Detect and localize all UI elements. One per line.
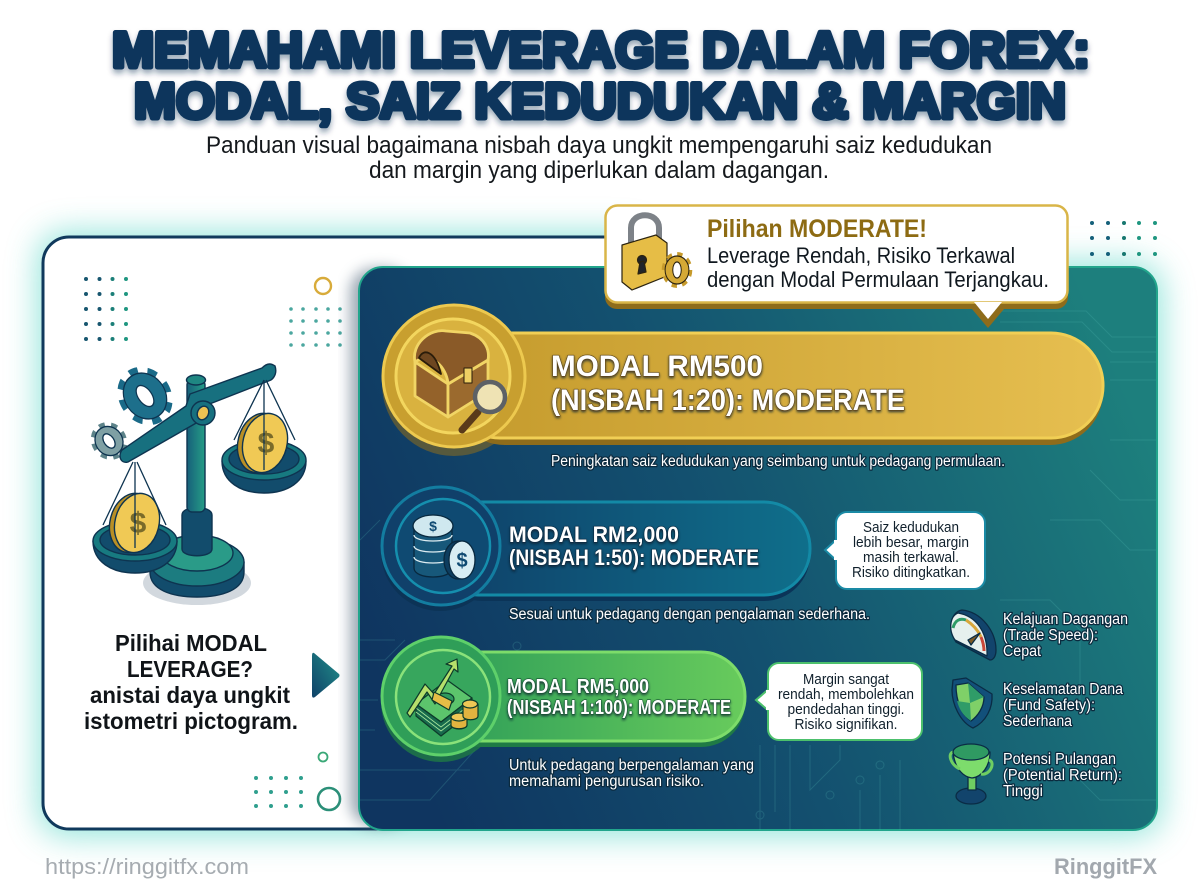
callout text: Leverage Rendah, Risiko Terkawal <box>707 243 1015 268</box>
panel: right leverage panel <box>359 206 1157 830</box>
callout: position size note <box>825 512 985 589</box>
potential return label: Tinggi <box>1003 783 1043 800</box>
callout: position size note: Saiz kedudukan <box>863 519 959 536</box>
banner: RM5,000 green <box>381 637 745 762</box>
left text block: Pilihai MODAL <box>115 630 267 656</box>
callout: margin note <box>756 663 922 740</box>
icon: coin stacks <box>413 515 475 579</box>
banner: RM2,000 blue <box>381 487 810 611</box>
icon: small gear <box>87 418 131 464</box>
potential return label: (Potential Return): <box>1003 767 1122 784</box>
callout: position size note: lebih besar, margin <box>853 534 969 551</box>
banner: RM500 gold <box>382 305 1103 456</box>
title: MODAL, SAIZ KEDUDUKAN & MARGIN <box>134 73 1066 129</box>
icon: coin stacks: $ <box>456 550 468 572</box>
subtitle <box>206 132 992 184</box>
fund safety label: (Fund Safety): <box>1003 697 1095 714</box>
icon: trophy <box>950 744 992 804</box>
potential return label: Potensi Pulangan <box>1003 751 1116 768</box>
scale post <box>187 380 205 512</box>
footer brand: RinggitFX <box>1054 854 1157 879</box>
icon: large gear <box>112 362 178 430</box>
background glow <box>38 232 1162 836</box>
callout <box>605 206 1068 328</box>
banner heading <box>509 522 759 570</box>
right pan bowl <box>222 461 306 493</box>
callout text: dengan Modal Permulaan Terjangkau. <box>707 267 1049 292</box>
callout text <box>707 243 1049 292</box>
potential return label <box>1003 751 1122 800</box>
fund safety label <box>1003 681 1123 730</box>
callout: margin note: pendedahan tinggi. <box>788 701 904 718</box>
banner heading: (NISBAH 1:100): MODERATE <box>507 697 731 719</box>
left text block: anistai daya ungkit <box>90 682 290 708</box>
icon: money stack with growth arrow <box>407 659 478 736</box>
fund safety label: Sederhana <box>1003 713 1072 730</box>
decorative dots: top right <box>1090 221 1157 256</box>
title <box>112 22 1090 129</box>
banner heading: (NISBAH 1:20): MODERATE <box>551 384 905 417</box>
decorative ring: small green <box>318 752 328 762</box>
decorative ring: large teal <box>318 788 340 810</box>
banner caption <box>509 757 754 790</box>
banner caption: memahami pengurusan risiko. <box>509 773 704 790</box>
trade speed label: (Trade Speed): <box>1003 627 1098 644</box>
callout: margin note: rendah, membolehkan <box>778 686 914 703</box>
icon: shield <box>952 678 992 728</box>
fund safety label: Keselamatan Dana <box>1003 681 1123 698</box>
icon: balance scale with gears <box>87 362 306 605</box>
circuit pattern <box>360 311 1156 830</box>
left text block: LEVERAGE? <box>127 656 253 682</box>
banner caption: Sesuai untuk pedagang dengan pengalaman sederhana. <box>509 606 870 623</box>
title: MEMAHAMI LEVERAGE DALAM FOREX: <box>112 22 1090 78</box>
panel: left card <box>43 237 663 829</box>
decorative dots: upper right <box>289 307 342 347</box>
banner caption: Peningkatan saiz kedudukan yang seimbang untuk pedagang permulaan. <box>551 453 1005 470</box>
decorative ring: gold <box>315 278 331 294</box>
left coin: $ <box>130 507 147 540</box>
left text block <box>84 630 298 734</box>
panel shadow <box>350 268 410 826</box>
banner heading: MODAL RM500 <box>551 350 763 383</box>
right coin <box>231 409 294 477</box>
subtitle: Panduan visual bagaimana nisbah daya ungkit mempengaruhi saiz kedudukan <box>206 132 992 159</box>
left text block: istometri pictogram. <box>84 708 298 734</box>
banner heading: (NISBAH 1:50): MODERATE <box>509 545 759 570</box>
callout: position size note: Risiko ditingkatkan. <box>852 564 970 581</box>
right pan strings <box>234 380 295 470</box>
trade speed label <box>1003 611 1128 660</box>
banner heading: MODAL RM2,000 <box>509 522 679 547</box>
icon: padlock and gear <box>622 215 690 290</box>
callout: margin note: Margin sangat <box>803 671 890 688</box>
decorative dots: lower right <box>254 776 303 808</box>
callout: margin note: Risiko signifikan. <box>794 716 898 733</box>
arrow <box>312 653 340 698</box>
icon: coin stacks: $ <box>429 518 437 534</box>
callout: position size note: masih terkawal. <box>863 549 959 566</box>
right coin: $ <box>258 427 275 460</box>
icon: speed gauge <box>951 610 996 660</box>
callout heading: Pilihan MODERATE! <box>707 215 927 243</box>
subtitle: dan margin yang diperlukan dalam dagangan. <box>369 157 829 184</box>
trade speed label: Cepat <box>1003 643 1042 660</box>
trade speed label: Kelajuan Dagangan <box>1003 611 1128 628</box>
left pan strings <box>103 462 166 548</box>
scale base <box>143 561 251 605</box>
footer url: https://ringgitfx.com <box>45 854 249 879</box>
banner caption: Untuk pedagang berpengalaman yang <box>509 757 754 774</box>
left coin <box>103 489 166 557</box>
icon: treasure chest with magnifier <box>414 331 505 430</box>
banner heading: MODAL RM5,000 <box>507 676 649 698</box>
banner heading <box>507 676 731 719</box>
scale beam <box>120 364 276 462</box>
left pan bowl <box>93 541 177 573</box>
decorative dots: upper left <box>84 277 128 341</box>
banner heading <box>551 350 905 417</box>
